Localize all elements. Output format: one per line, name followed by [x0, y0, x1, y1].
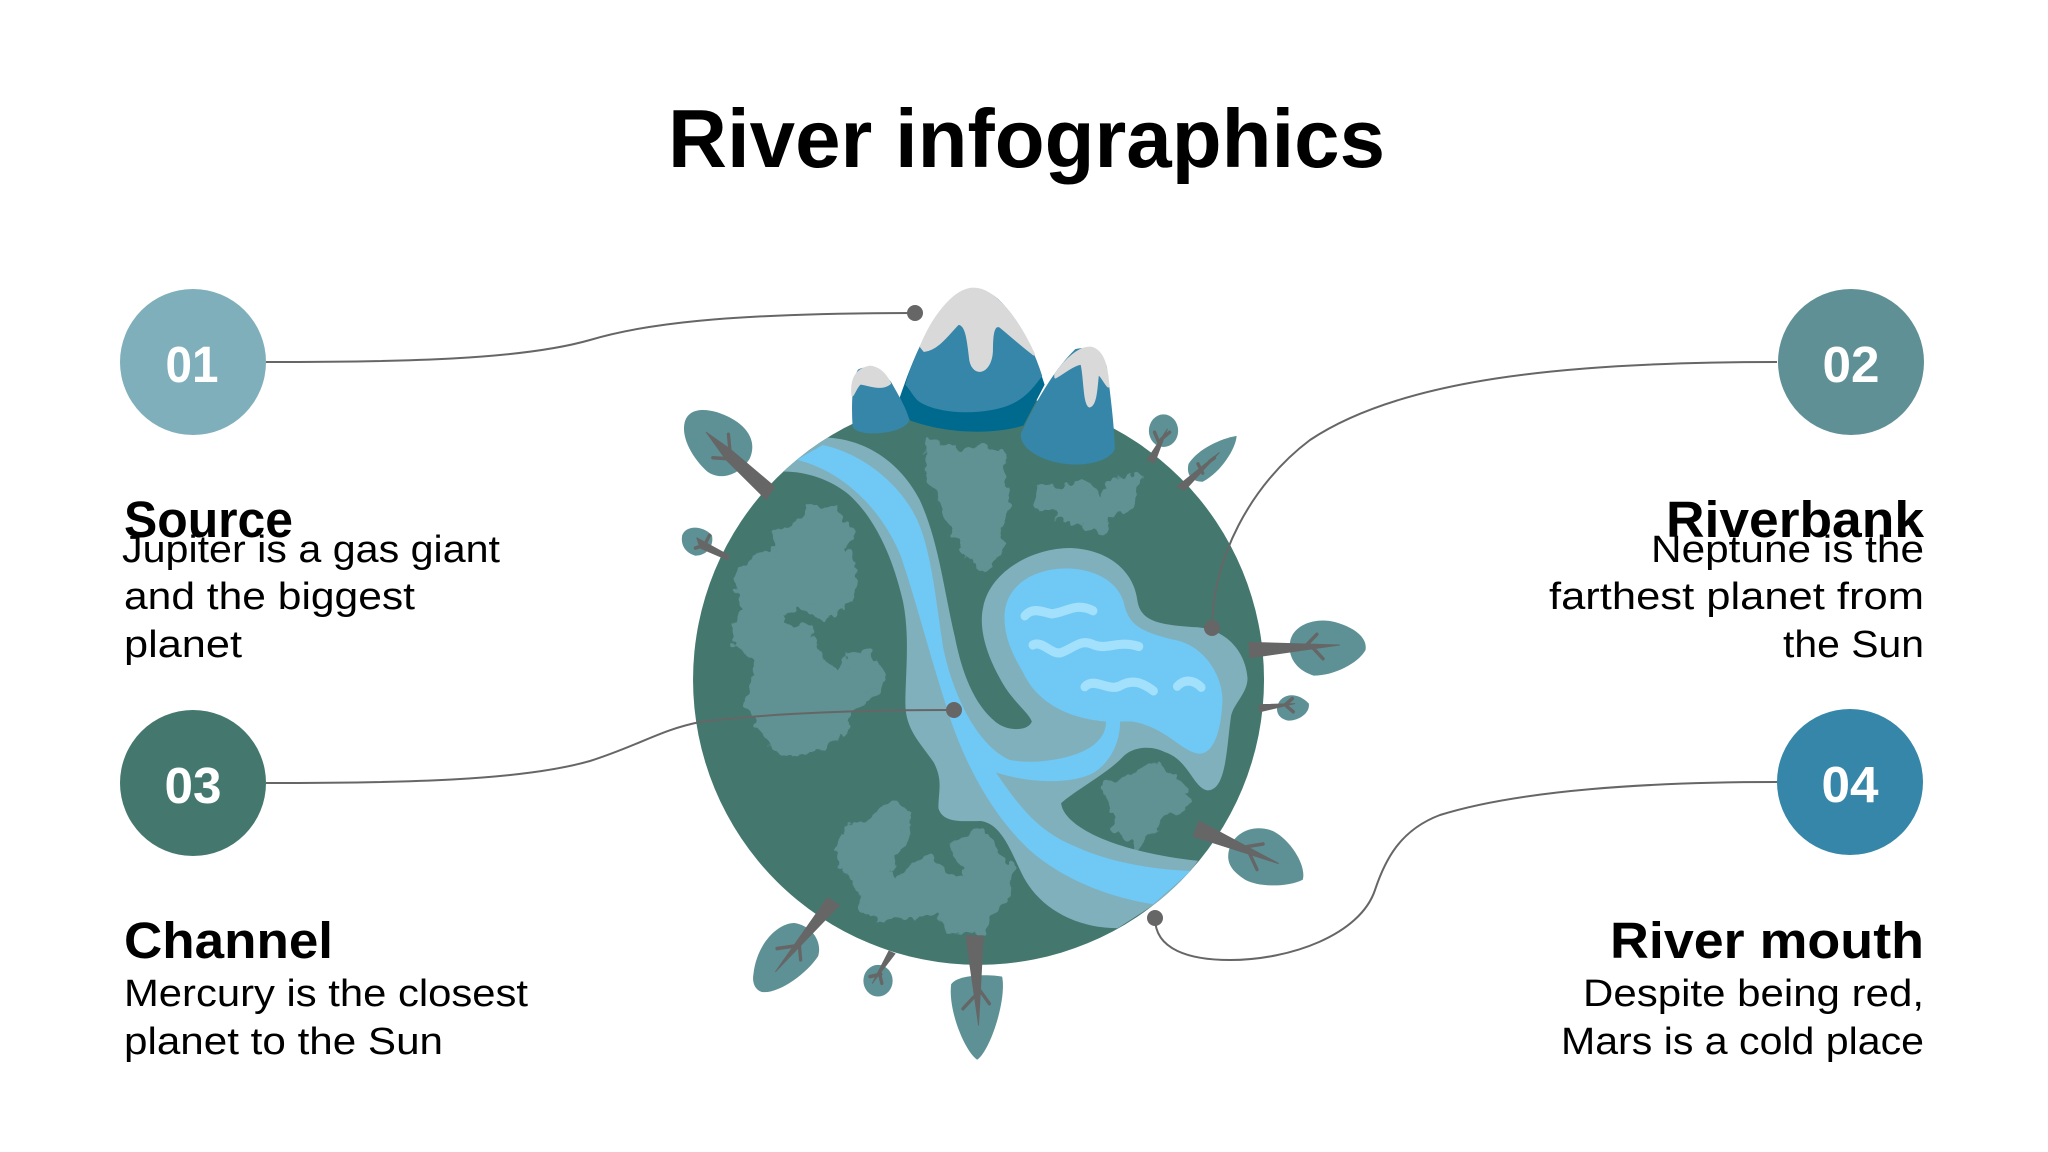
connector: 01 to mountain — [266, 305, 923, 362]
panel: riverbank — [1549, 289, 1925, 666]
text: river mouth: Despite being red, — [1583, 973, 1924, 1015]
forest patches — [735, 443, 1189, 931]
text: source: and the biggest — [124, 576, 415, 618]
tree: right large — [1249, 620, 1366, 676]
panel: channel — [120, 710, 528, 1063]
text: source — [122, 529, 500, 666]
badge 01 — [120, 289, 266, 435]
mountain: centre — [900, 289, 1045, 432]
text: river mouth: Mars is a cold place — [1561, 1021, 1924, 1063]
lake waves — [1025, 607, 1201, 691]
lower right trunk over planet — [1193, 821, 1278, 863]
mountains — [852, 289, 1115, 465]
mountain: right — [1021, 348, 1115, 465]
text: riverbank: Neptune is the — [1651, 529, 1924, 571]
forest: inner lower — [1105, 766, 1189, 843]
badge 03: 03 — [164, 757, 222, 814]
tree: top left large — [684, 410, 775, 500]
text: source: planet — [124, 624, 242, 666]
forest: top right — [1039, 477, 1138, 528]
text: river mouth — [1561, 973, 1924, 1063]
tree: bottom large — [951, 936, 1003, 1060]
forest: top centre — [929, 443, 1007, 566]
badge 03 — [120, 710, 266, 856]
text: channel — [124, 973, 528, 1063]
text: riverbank: the Sun — [1783, 624, 1924, 666]
planet illustration — [682, 289, 1366, 1060]
planet sphere — [693, 394, 1264, 965]
mountain: left — [852, 367, 909, 433]
text: riverbank: farthest planet from — [1549, 576, 1924, 618]
tree: right small — [1259, 695, 1309, 721]
title: River infographics — [668, 92, 1385, 185]
text: channel: planet to the Sun — [124, 1021, 443, 1063]
tree: top right slender — [1177, 436, 1237, 490]
tree: bottom left — [753, 898, 839, 992]
lake — [1004, 568, 1223, 754]
tree: bottom small — [863, 951, 895, 997]
connector: 03 to channel — [266, 702, 962, 783]
tree: left small — [682, 528, 729, 560]
panel: river mouth — [1561, 709, 1924, 1063]
trees — [682, 410, 1366, 997]
forest: bottom — [839, 805, 1011, 931]
river banks — [783, 437, 1248, 928]
heading: source: Source — [124, 491, 293, 548]
badge 02: 02 — [1822, 336, 1880, 393]
text: riverbank — [1549, 529, 1924, 666]
connector: 04 to river mouth — [1147, 782, 1777, 960]
badge 02 — [1778, 289, 1924, 435]
heading: channel: Channel — [124, 912, 333, 969]
forest: left — [735, 508, 885, 753]
heading: riverbank: Riverbank — [1666, 491, 1925, 548]
text: channel: Mercury is the closest — [124, 973, 528, 1015]
river channel — [797, 445, 1191, 904]
panel: source — [120, 289, 500, 666]
heading: river mouth: River mouth — [1610, 912, 1924, 969]
tree: top right small — [1147, 414, 1178, 463]
badge 04: 04 — [1822, 756, 1879, 813]
tree: lower right — [1193, 821, 1303, 885]
text: source: Jupiter is a gas giant — [122, 529, 500, 571]
connector: 02 to lake — [1204, 362, 1777, 636]
badge 01: 01 — [166, 336, 218, 393]
badge 04 — [1777, 709, 1923, 855]
